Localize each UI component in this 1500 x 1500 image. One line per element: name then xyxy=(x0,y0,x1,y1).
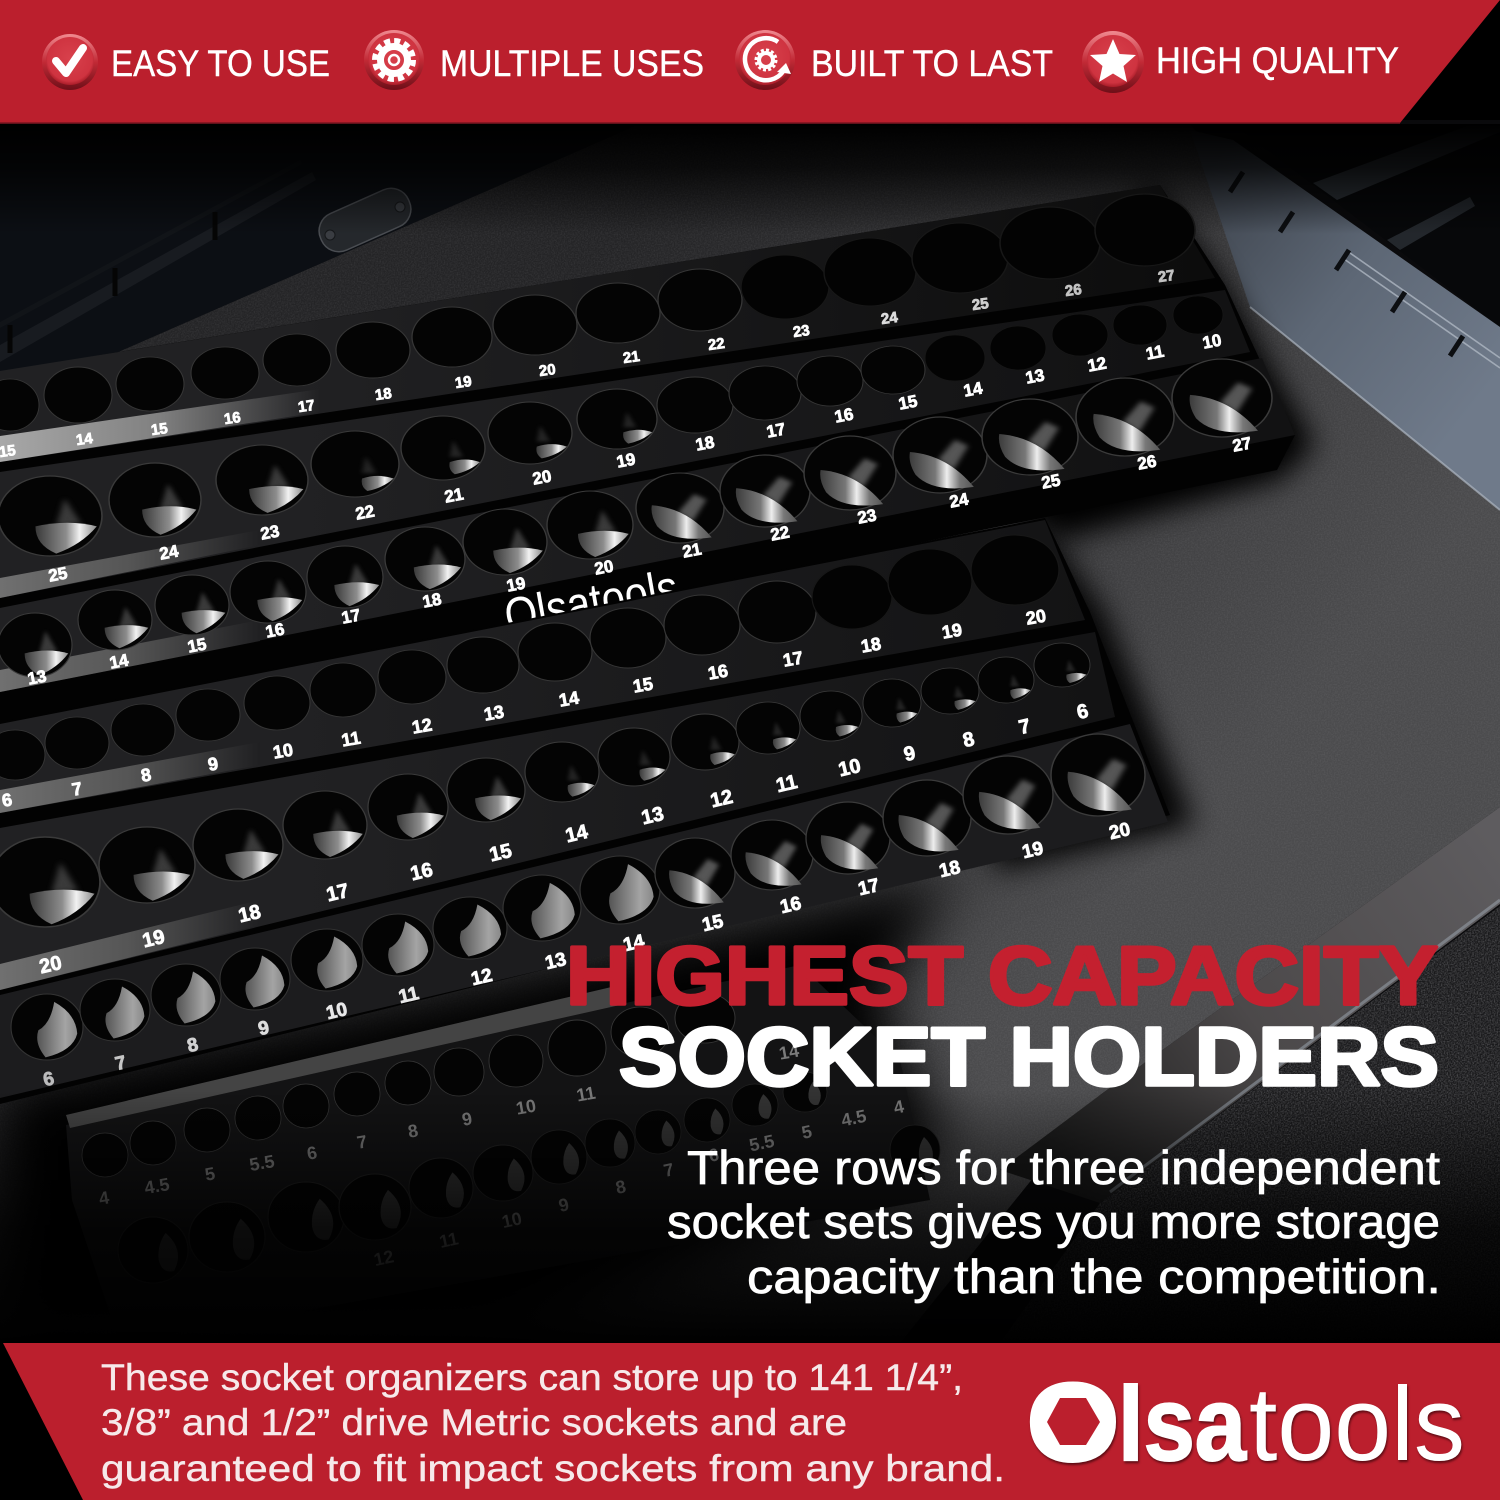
row B: strip, holes and labels 25 to 10: 21 xyxy=(443,484,465,507)
row B: strip, holes and labels 25 to 10: 16 xyxy=(833,404,855,427)
dim tray size labels: 5.5 xyxy=(747,1131,776,1156)
dim tray size labels: 8 xyxy=(614,1176,628,1198)
description text: socket sets gives you more storage xyxy=(667,1195,1440,1248)
row E: strip, holes and labels 20 to 6: 11 xyxy=(774,771,799,797)
row D: strip, holes and labels 6 to 20: 16 xyxy=(706,661,730,684)
row C: strip, holes and labels 13 to 27: 18 xyxy=(421,589,443,612)
socket tray two xyxy=(0,518,1170,1104)
row A: strip, holes and labels 14 to 27: 22 xyxy=(707,335,726,354)
dark falloff at top of the photo xyxy=(0,124,1500,234)
row F: strip, holes and labels 6 to 20: 16 xyxy=(778,893,803,918)
row D: strip, holes and labels 6 to 20 xyxy=(0,520,1085,813)
row D: strip, holes and labels 6 to 20: 19 xyxy=(940,620,964,643)
row B: strip, holes and labels 25 to 10 xyxy=(0,290,1250,598)
description text: capacity than the competition. xyxy=(747,1250,1441,1303)
row B: strip, holes and labels 25 to 10: 18 xyxy=(694,432,716,455)
mounting plate with screws xyxy=(313,182,417,258)
row F: strip, holes and labels 6 to 20: 6 xyxy=(41,1068,56,1091)
row D: strip, holes and labels 6 to 20: 10 xyxy=(271,740,295,763)
row F: strip, holes and labels 6 to 20: 18 xyxy=(937,857,962,882)
row C: strip, holes and labels 13 to 27: 21 xyxy=(681,539,703,562)
row D: strip, holes and labels 6 to 20: 9 xyxy=(206,753,220,775)
row E: strip, holes and labels 20 to 6: 18 xyxy=(236,901,263,927)
row D: strip, holes and labels 6 to 20: 12 xyxy=(410,715,434,738)
row A: strip, holes and labels 14 to 27: 23 xyxy=(792,322,811,341)
row F: strip, holes and labels 6 to 20: 12 xyxy=(469,965,494,990)
headline: HIGHEST CAPACITY xyxy=(566,929,1438,1022)
row B: strip, holes and labels 25 to 10: 19 xyxy=(615,449,637,472)
dim tray size labels: 11 xyxy=(437,1228,460,1252)
row F: strip, holes and labels 6 to 20: 8 xyxy=(185,1034,200,1057)
footer description xyxy=(101,1357,1005,1489)
row C: strip, holes and labels 13 to 27 xyxy=(0,358,1295,692)
row C: strip, holes and labels 13 to 27: 13 xyxy=(26,666,48,689)
carpet floor xyxy=(1000,906,1500,1343)
row F: strip, holes and labels 6 to 20: 15 xyxy=(700,911,726,936)
row E: strip, holes and labels 20 to 6: 13 xyxy=(639,803,666,829)
row F: strip, holes and labels 6 to 20: 19 xyxy=(1020,838,1045,863)
row E: strip, holes and labels 20 to 6: 15 xyxy=(487,840,514,866)
dim tray size labels: 4 xyxy=(97,1187,111,1209)
tray brand mark, partly hidden: Olsatools xyxy=(500,559,682,645)
row A: strip, holes and labels 14 to 27: 24 xyxy=(880,309,899,328)
row C: strip, holes and labels 13 to 27: 20 xyxy=(593,556,615,579)
row C: strip, holes and labels 13 to 27: 23 xyxy=(856,505,878,528)
dim tray size labels: 4.5 xyxy=(143,1174,171,1198)
dim tray size labels: 6 xyxy=(305,1142,319,1164)
dim tray size labels: 7 xyxy=(355,1131,369,1153)
dim tray size labels: 6 xyxy=(707,1144,721,1166)
row C: strip, holes and labels 13 to 27: 19 xyxy=(505,573,527,596)
row C: strip, holes and labels 13 to 27: 22 xyxy=(769,522,791,545)
row A: strip, holes and labels 14 to 27: 27 xyxy=(1157,267,1176,286)
row D: strip, holes and labels 6 to 20: 13 xyxy=(482,702,506,725)
header banner xyxy=(0,0,1500,123)
dim tray holes xyxy=(82,993,940,1283)
row B: strip, holes and labels 25 to 10: 12 xyxy=(1086,353,1108,376)
row E: strip, holes and labels 20 to 6: 7 xyxy=(1017,715,1033,739)
headline: SOCKET HOLDERS xyxy=(619,1010,1439,1103)
row F: strip, holes and labels 6 to 20: 10 xyxy=(324,999,349,1024)
row F: strip, holes and labels 6 to 20 xyxy=(0,724,1168,1098)
row A: strip, holes and labels 14 to 27: 18 xyxy=(374,385,393,404)
dim tray size labels: 14 xyxy=(777,1041,801,1064)
footer description: 3/8” and 1/2” drive Metric sockets and are xyxy=(101,1402,847,1443)
row A: strip, holes and labels 14 to 27: 26 xyxy=(1064,281,1083,300)
row D: strip, holes and labels 6 to 20: 6 xyxy=(0,789,14,811)
row D: strip, holes and labels 6 to 20: 20 xyxy=(1024,606,1048,629)
Olsatools logo: lsa xyxy=(1118,1366,1247,1483)
row F: strip, holes and labels 6 to 20: 11 xyxy=(397,983,421,1008)
row D: strip, holes and labels 6 to 20: 15 xyxy=(631,674,655,697)
row D: strip, holes and labels 6 to 20: 11 xyxy=(340,728,362,751)
bottom fade to black xyxy=(0,1090,1500,1345)
dim tray size labels: 7 xyxy=(662,1159,676,1181)
row E: strip, holes and labels 20 to 6 xyxy=(0,632,1115,990)
row A: strip, holes and labels 14 to 27: 19 xyxy=(454,373,473,392)
dim tray size labels: 8 xyxy=(406,1120,420,1142)
dim tray size labels: 10 xyxy=(514,1096,538,1119)
dim tray size labels: 4 xyxy=(892,1096,906,1118)
dim tray size labels xyxy=(97,1041,906,1270)
dim tray size labels: 10 xyxy=(500,1208,524,1232)
row D: strip, holes and labels 6 to 20: 8 xyxy=(139,764,153,786)
footer banner xyxy=(3,1343,1500,1500)
row D: strip, holes and labels 6 to 20: 14 xyxy=(557,688,581,711)
row E: strip, holes and labels 20 to 6: 8 xyxy=(961,728,977,752)
description text xyxy=(667,1141,1441,1303)
row E: strip, holes and labels 20 to 6: 6 xyxy=(1075,700,1091,724)
row A: strip, holes and labels 14 to 27: 21 xyxy=(622,348,641,367)
row E: strip, holes and labels 20 to 6: 9 xyxy=(902,742,918,766)
row C: strip, holes and labels 13 to 27: 17 xyxy=(340,605,362,628)
headline xyxy=(566,929,1439,1103)
dim tray size labels: 12 xyxy=(372,1246,396,1270)
benefit: multiple uses: MULTIPLE USES xyxy=(440,43,704,84)
row B: strip, holes and labels 25 to 10: 13 xyxy=(1024,365,1046,388)
row B: strip, holes and labels 25 to 10: 20 xyxy=(531,466,553,489)
drawer interior at top left xyxy=(0,124,640,372)
benefit: easy to use: EASY TO USE xyxy=(111,43,330,84)
row D: strip, holes and labels 6 to 20: 18 xyxy=(859,634,883,657)
row F: strip, holes and labels 6 to 20: 9 xyxy=(256,1017,271,1040)
icon: gear badge xyxy=(364,30,424,90)
dim tray size labels: 9 xyxy=(557,1194,571,1216)
row C: strip, holes and labels 13 to 27: 27 xyxy=(1231,433,1253,456)
dim tray size labels: 5 xyxy=(800,1121,814,1143)
metal drawer rail with hinge xyxy=(1190,124,1500,510)
row B: strip, holes and labels 25 to 10: 23 xyxy=(259,521,281,544)
dim tray size labels: 11 xyxy=(575,1083,597,1106)
row F: strip, holes and labels 6 to 20: 7 xyxy=(113,1052,128,1075)
row A: strip, holes and labels 14 to 27: 14 xyxy=(75,430,94,449)
row E: strip, holes and labels 20 to 6: 16 xyxy=(408,859,435,885)
footer description: guaranteed to fit impact sockets from any brand. xyxy=(101,1448,1005,1489)
row E: strip, holes and labels 20 to 6: 14 xyxy=(563,821,591,847)
row F: strip, holes and labels 6 to 20: 20 xyxy=(1107,819,1132,844)
row B: strip, holes and labels 25 to 10: 24 xyxy=(158,541,181,564)
mat side edge band xyxy=(1000,807,1500,1203)
benefit: built to last: BUILT TO LAST xyxy=(811,43,1053,84)
row E: strip, holes and labels 20 to 6: 19 xyxy=(140,926,167,952)
row A: strip, holes and labels 14 to 27: 25 xyxy=(971,295,990,314)
row C: strip, holes and labels 13 to 27: 15 xyxy=(186,634,208,657)
row D: strip, holes and labels 6 to 20: 17 xyxy=(781,648,805,671)
dim tray size labels: 9 xyxy=(460,1108,474,1130)
socket tray three, dim lower tray xyxy=(66,965,940,1343)
Olsatools logo: O xyxy=(1026,1360,1120,1485)
row E: strip, holes and labels 20 to 6: 17 xyxy=(324,880,351,906)
row D: strip, holes and labels 6 to 20: 7 xyxy=(70,778,84,800)
row E: strip, holes and labels 20 to 6: 20 xyxy=(37,952,64,978)
row F: strip, holes and labels 6 to 20: 13 xyxy=(543,949,568,974)
icon: cycle gear badge xyxy=(735,30,795,90)
row A: strip, holes and labels 14 to 27: 17 xyxy=(297,397,316,416)
row A: strip, holes and labels 14 to 27: 15 xyxy=(150,420,169,439)
row B: strip, holes and labels 25 to 10: 11 xyxy=(1144,342,1166,364)
dim tray size labels: 4.5 xyxy=(839,1106,868,1131)
row B: strip, holes and labels 25 to 10: 10 xyxy=(1201,330,1223,353)
row E: strip, holes and labels 20 to 6: 12 xyxy=(708,786,735,812)
row C: strip, holes and labels 13 to 27: 24 xyxy=(948,489,971,512)
Olsatools logo xyxy=(1026,1360,1465,1485)
dim tray size labels: 5 xyxy=(203,1163,217,1185)
row B: strip, holes and labels 25 to 10: 22 xyxy=(354,501,376,524)
row A: strip, holes and labels 14 to 27: 16 xyxy=(223,409,242,428)
row A: strip, holes and labels 14 to 27 xyxy=(0,185,1215,462)
row B: strip, holes and labels 25 to 10: 14 xyxy=(962,378,985,401)
footer description: These socket organizers can store up to 141 1/4”, xyxy=(101,1357,963,1398)
socket tray one xyxy=(0,185,1295,730)
dim tray size labels: 5.5 xyxy=(248,1151,276,1175)
row F: strip, holes and labels 6 to 20: 14 xyxy=(621,931,647,956)
row B: strip, holes and labels 25 to 10: 25 xyxy=(47,563,69,586)
row A: strip, holes and labels 14 to 27: 20 xyxy=(538,361,557,380)
row B: strip, holes and labels 25 to 10: 15 xyxy=(897,391,919,414)
row C: strip, holes and labels 13 to 27: 16 xyxy=(264,619,286,642)
row B: strip, holes and labels 25 to 10: 17 xyxy=(765,419,787,442)
tray three top rail xyxy=(66,985,620,1128)
icon: check mark badge xyxy=(42,34,98,90)
mat shadows xyxy=(0,180,1315,1343)
description text: Three rows for three independent xyxy=(687,1141,1440,1194)
row E: strip, holes and labels 20 to 6: 10 xyxy=(836,755,863,781)
benefit: high quality: HIGH QUALITY xyxy=(1156,40,1399,81)
row C: strip, holes and labels 13 to 27: 14 xyxy=(108,650,131,673)
Olsatools logo: tools xyxy=(1249,1366,1465,1483)
icon: star badge xyxy=(1082,31,1144,93)
row C: strip, holes and labels 13 to 27: 26 xyxy=(1136,451,1158,474)
row F: strip, holes and labels 6 to 20: 17 xyxy=(856,875,881,900)
row C: strip, holes and labels 13 to 27: 25 xyxy=(1040,470,1062,493)
